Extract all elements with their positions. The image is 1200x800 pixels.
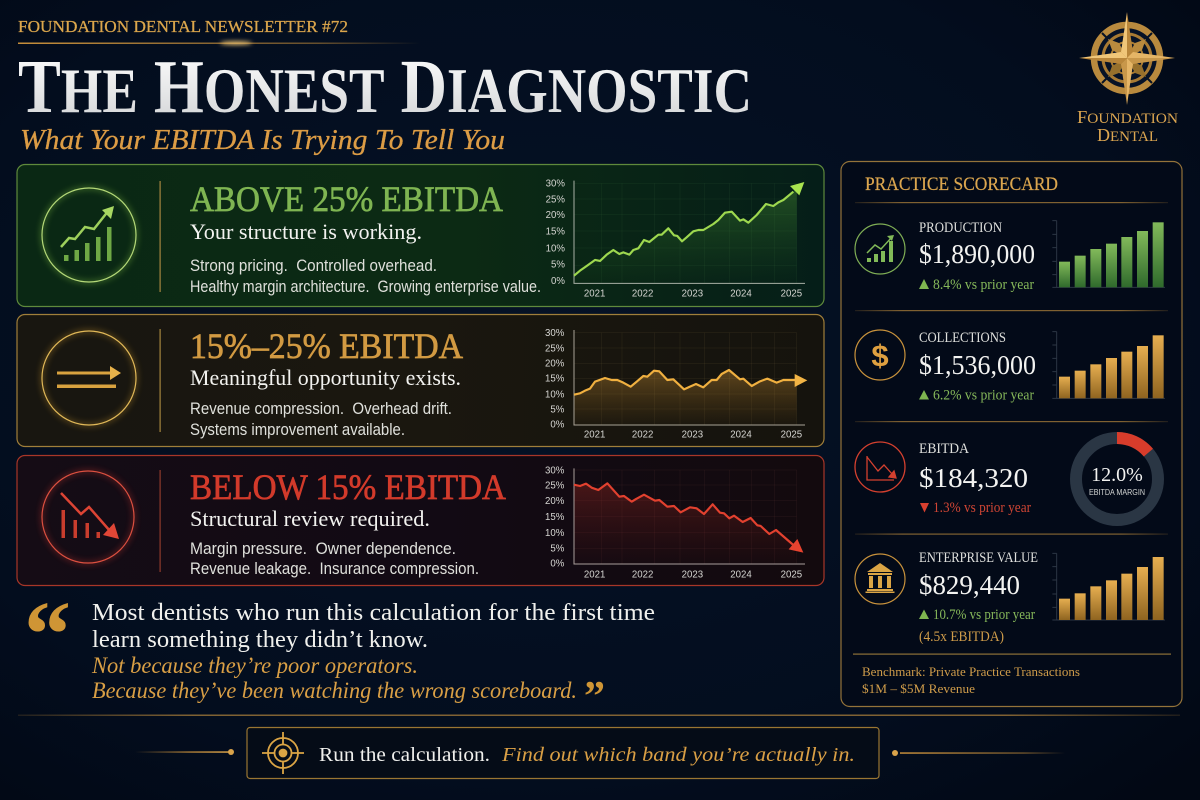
body text bbox=[190, 400, 452, 439]
metric: EBITDA: 1.3% vs prior year bbox=[933, 500, 1031, 516]
body text: Revenue compression. Overhead drift. bbox=[190, 400, 452, 418]
icon: bank building bbox=[855, 554, 905, 604]
subheading: Meaningful opportunity exists. bbox=[190, 365, 461, 390]
line chart: falling margin: 0% bbox=[550, 559, 565, 570]
body text: Margin pressure. Owner dependence. bbox=[190, 540, 456, 558]
metric: collections: 6.2% vs prior year bbox=[933, 388, 1034, 404]
line chart: falling margin: 25% bbox=[545, 480, 565, 491]
metric: collections bbox=[855, 330, 1165, 404]
icon: dollar sign: $ bbox=[871, 338, 889, 373]
body text: Strong pricing. Controlled overhead. bbox=[190, 257, 437, 275]
line chart: flat margin: 2022 bbox=[632, 430, 653, 441]
metric: production: PRODUCTION bbox=[919, 220, 1002, 236]
line chart: falling margin: 20% bbox=[545, 496, 565, 507]
line chart: rising margin bbox=[546, 179, 805, 300]
panel: practice scorecard bbox=[841, 162, 1182, 706]
eyebrow: newsletter label bbox=[18, 17, 420, 45]
line chart: rising margin: 2023 bbox=[682, 289, 703, 300]
line chart: falling margin: 5% bbox=[550, 544, 565, 555]
pull quote: Most dentists who run this calculation for the first time bbox=[92, 599, 655, 626]
line chart: falling margin: 30% bbox=[545, 465, 565, 476]
line chart: rising margin: 15% bbox=[546, 226, 565, 237]
line chart: rising margin: 2025 bbox=[781, 289, 802, 300]
line chart: flat margin: 2021 bbox=[584, 430, 605, 441]
donut chart: EBITDA margin bbox=[1076, 438, 1158, 520]
line chart: falling margin: 2022 bbox=[632, 569, 653, 580]
pull quote: Because they’ve been watching the wrong scoreboard. bbox=[92, 678, 577, 704]
metric: enterprise value bbox=[855, 550, 1165, 645]
donut chart: EBITDA margin: 12.0% bbox=[1091, 464, 1143, 486]
body text: Healthy margin architecture. Growing enterprise value. bbox=[190, 278, 541, 296]
heading: 15%–25% EBITDA bbox=[190, 326, 463, 366]
icon: dollar sign bbox=[855, 330, 905, 380]
line chart: rising margin: 2022 bbox=[632, 289, 653, 300]
subheading: Your structure is working. bbox=[190, 219, 422, 244]
line chart: rising margin: 25% bbox=[546, 194, 565, 205]
line chart: falling margin: 2023 bbox=[682, 569, 703, 580]
icon: falling chart bbox=[855, 442, 905, 492]
benchmark note: $1M – $5M Revenue bbox=[862, 681, 975, 696]
line chart: rising margin: 2024 bbox=[730, 289, 752, 300]
scorecard heading: PRACTICE SCORECARD bbox=[865, 174, 1058, 195]
metric: collections: $1,536,000 bbox=[919, 350, 1036, 380]
eyebrow: newsletter label: FOUNDATION DENTAL NEWSLETTER #72 bbox=[18, 17, 348, 36]
logo: Foundation Dental compass: DENTAL bbox=[1097, 125, 1158, 145]
subtitle: What Your EBITDA Is Trying To Tell You bbox=[20, 124, 505, 156]
line chart: falling margin bbox=[545, 465, 805, 580]
icon: rising chart in glowing circle bbox=[42, 188, 136, 282]
line chart: falling margin: 2025 bbox=[781, 569, 802, 580]
metric: production: $1,890,000 bbox=[919, 239, 1035, 269]
call to action bbox=[135, 728, 1065, 778]
line chart: rising margin: 5% bbox=[551, 259, 565, 270]
pull quote: Not because they’re poor operators. bbox=[91, 653, 418, 679]
metric: enterprise value: ENTERPRISE VALUE bbox=[919, 550, 1038, 566]
line chart: falling margin: 2024 bbox=[730, 569, 752, 580]
bar chart: enterprise value bbox=[1052, 553, 1165, 620]
metric: EBITDA: $184,320 bbox=[919, 463, 1028, 493]
call to action: Run the calculation. bbox=[319, 744, 490, 766]
line chart: rising margin: 2021 bbox=[584, 289, 605, 300]
panel: below 15% EBITDA bbox=[17, 456, 824, 586]
icon: production chart bbox=[855, 224, 905, 274]
icon: falling chart in glowing circle bbox=[42, 471, 134, 563]
body text: Revenue leakage. Insurance compression. bbox=[190, 560, 479, 578]
title: THE HONEST DIAGNOSTIC bbox=[18, 45, 752, 129]
metric: enterprise value: $829,440 bbox=[919, 570, 1020, 600]
body text: Systems improvement available. bbox=[190, 421, 405, 439]
metric: collections: COLLECTIONS bbox=[919, 330, 1006, 346]
line chart: falling margin: 15% bbox=[545, 512, 565, 523]
heading: ABOVE 25% EBITDA bbox=[190, 179, 503, 219]
line chart: flat margin: 10% bbox=[545, 389, 565, 400]
benchmark note: Benchmark: Private Practice Transactions bbox=[862, 664, 1080, 679]
metric: enterprise value: (4.5x EBITDA) bbox=[919, 629, 1004, 645]
metric: enterprise value: 10.7% vs prior year bbox=[933, 607, 1035, 623]
pull quote bbox=[24, 583, 655, 720]
line chart: flat margin: 30% bbox=[545, 328, 565, 339]
benchmark note bbox=[862, 664, 1080, 696]
line chart: flat margin: 15% bbox=[545, 374, 565, 385]
pull quote: learn something they didn’t know. bbox=[92, 626, 428, 653]
metric: production: 8.4% vs prior year bbox=[933, 277, 1034, 293]
icon: opening quote mark: “ bbox=[24, 583, 71, 687]
heading: BELOW 15% EBITDA bbox=[190, 467, 506, 507]
body text bbox=[190, 540, 479, 578]
line chart: flat margin: 2024 bbox=[730, 430, 752, 441]
line chart: flat margin: 2023 bbox=[682, 430, 703, 441]
line chart: rising margin: 10% bbox=[546, 243, 565, 254]
line chart: flat margin: 0% bbox=[550, 420, 565, 431]
subheading: Structural review required. bbox=[190, 506, 430, 531]
line chart: rising margin: 0% bbox=[551, 276, 565, 287]
icon: target bbox=[262, 732, 304, 774]
call to action: Find out which band you’re actually in. bbox=[501, 744, 855, 766]
line chart: falling margin: 2021 bbox=[584, 569, 605, 580]
line chart: flat margin bbox=[545, 328, 807, 441]
logo: Foundation Dental compass: FOUNDATION bbox=[1077, 107, 1178, 127]
metric: EBITDA bbox=[855, 438, 1158, 520]
donut chart: EBITDA margin: EBITDA MARGIN bbox=[1089, 487, 1145, 497]
metric: production bbox=[855, 220, 1165, 293]
line chart: rising margin: 30% bbox=[546, 179, 565, 190]
bar chart: collections bbox=[1052, 332, 1165, 398]
logo: Foundation Dental compass bbox=[1077, 12, 1178, 145]
bar chart: production bbox=[1052, 221, 1165, 287]
line chart: flat margin: 2025 bbox=[781, 430, 802, 441]
panel: above 25% EBITDA bbox=[17, 164, 824, 306]
line chart: flat margin: 25% bbox=[545, 343, 565, 354]
panel: 15%-25% EBITDA bbox=[17, 314, 824, 446]
line chart: rising margin: 20% bbox=[546, 210, 565, 221]
line chart: falling margin: 10% bbox=[545, 528, 565, 539]
body text bbox=[190, 257, 541, 296]
pull quote: ” bbox=[584, 674, 605, 720]
icon: flat arrow in glowing circle bbox=[42, 331, 136, 425]
metric: EBITDA: EBITDA bbox=[919, 441, 969, 457]
line chart: flat margin: 20% bbox=[545, 359, 565, 370]
line chart: flat margin: 5% bbox=[550, 404, 565, 415]
